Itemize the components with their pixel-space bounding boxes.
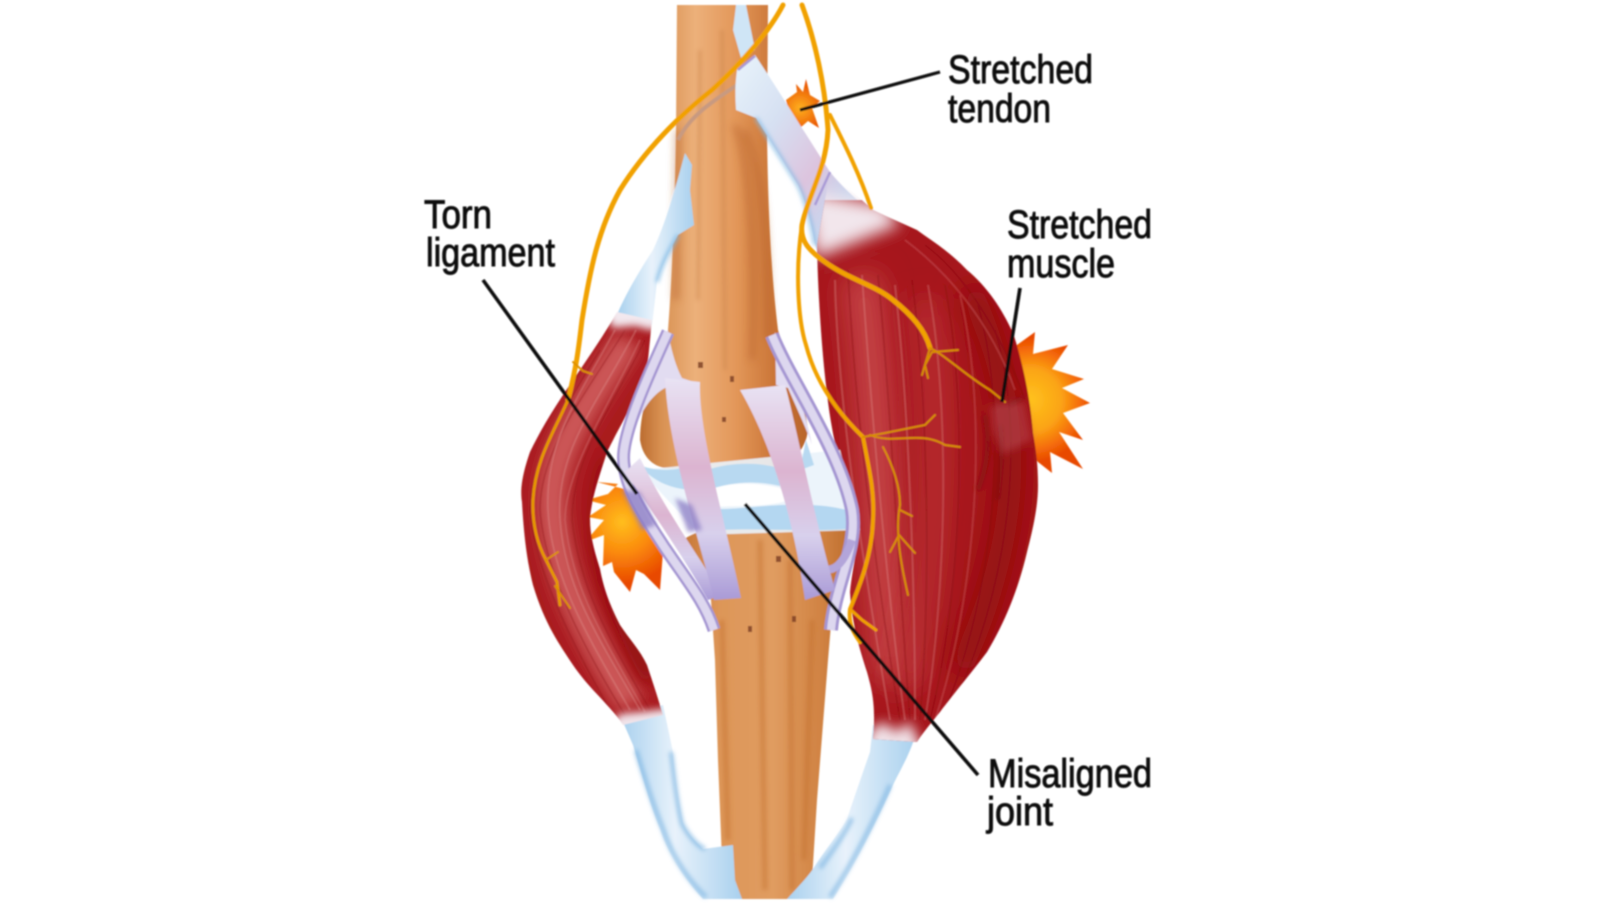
capsule ligament: left [623,332,714,630]
label: misaligned joint: Misaligned [988,752,1152,796]
upper bone [640,5,808,476]
muscle-tendon fade: big muscle bottom [872,710,925,743]
muscle-tendon fade: big muscle top [805,190,900,258]
large right muscle [805,190,1045,755]
small flash: tendon pain burst [786,79,820,128]
knee joint capsule and ligaments [622,330,860,630]
capsule ligament: right [772,335,853,630]
right ligament strand [740,385,835,600]
lower bone [683,529,847,899]
artwork: knee anatomy illustration [424,5,1152,899]
label: stretched tendon: Stretched [948,48,1093,92]
nerves [533,5,1005,642]
label: misaligned joint [986,752,1152,834]
left flash: ligament pain burst [585,482,663,592]
label: stretched muscle: Stretched [1007,203,1152,247]
label: stretched muscle [1007,203,1152,286]
torn fibres [622,490,702,532]
capsule attachment: left wedge [634,330,700,430]
torn ligament strand [625,458,722,600]
leader line: misaligned joint [745,504,978,775]
label: stretched tendon [948,48,1093,131]
upper right tendon [733,5,880,260]
lower left tendon [620,705,742,899]
label: torn ligament [424,193,555,275]
muscle-tendon fade: left top [606,311,653,337]
centre ligament strand [665,378,741,600]
label: torn ligament: ligament [426,231,555,275]
leader line: stretched tendon [800,72,940,110]
infographic: knee joint injury diagram [423,2,1152,900]
left muscle [520,312,663,726]
label: misaligned joint: joint [986,790,1053,834]
lower right tendon [787,725,917,899]
label: stretched muscle: muscle [1007,242,1115,286]
label: torn ligament: Torn [424,193,492,237]
muscle-tendon fade: left bottom [614,702,664,726]
right flash: muscle pain burst [1010,332,1090,473]
meniscus: cartilage bands [640,440,860,535]
capsule attachment: right wedge [775,332,812,445]
leader line: torn ligament [483,280,637,494]
leader line: stretched muscle [1002,288,1020,402]
upper left tendon [617,153,694,325]
label: stretched tendon: tendon [948,87,1051,131]
